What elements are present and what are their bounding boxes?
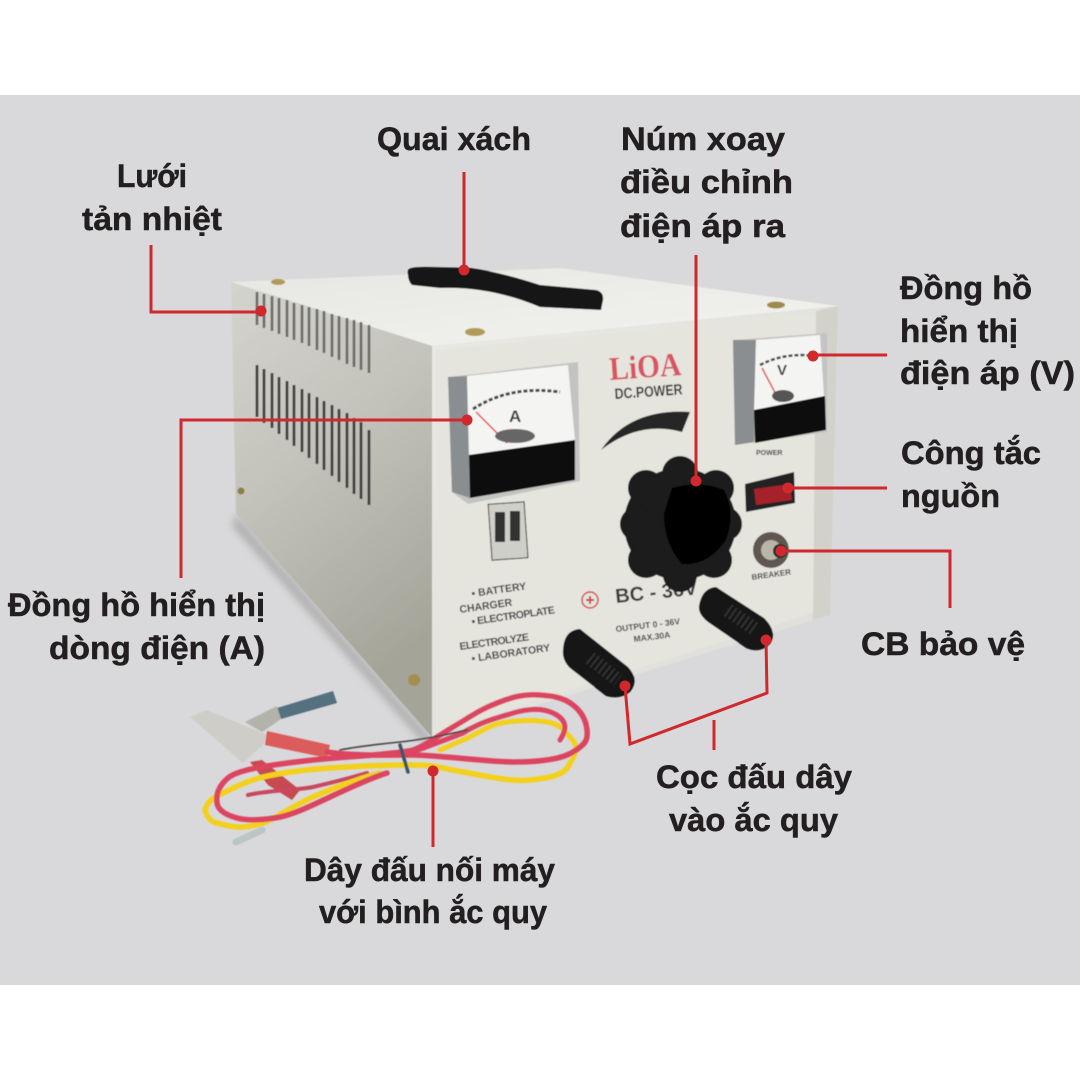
brand logo and panel print: DC.POWER xyxy=(614,381,683,403)
label list on panel: CHARGER xyxy=(459,597,513,616)
callout: ammeter: Đồng hồ hiển thị xyxy=(8,587,265,623)
callout: rotary knob: Núm xoay xyxy=(621,121,785,157)
callout: power switch: Công tắc xyxy=(901,435,1041,471)
side screws xyxy=(238,488,244,494)
callout: terminals xyxy=(620,634,852,838)
wires and clips xyxy=(190,691,587,842)
rotary knob xyxy=(620,456,742,592)
power switch xyxy=(745,472,795,512)
label list on panel: ▪ LABORATORY xyxy=(471,642,551,665)
voltmeter: V xyxy=(777,362,787,379)
model text: MAX.30A xyxy=(633,630,671,644)
callout: voltmeter xyxy=(808,270,1075,391)
brand logo and panel print: POWER xyxy=(756,450,782,457)
handle xyxy=(408,267,603,310)
breaker xyxy=(751,532,792,582)
callout: circuit breaker: CB bảo vệ xyxy=(861,626,1025,662)
callout: cooling vents: tản nhiệt xyxy=(82,201,222,237)
label list on panel: ▪ BATTERY xyxy=(471,580,527,600)
product photo: battery charger xyxy=(190,267,838,842)
top face xyxy=(231,268,838,346)
left terminal xyxy=(563,629,635,697)
brand logo and panel print: LiOA xyxy=(608,347,683,388)
callout: terminals: vào ắc quy xyxy=(669,802,838,838)
callout: power switch: nguồn xyxy=(901,478,1000,514)
model text xyxy=(582,577,699,644)
callout: connecting wires: với bình ắc quy xyxy=(319,894,547,930)
model text: OUTPUT 0 - 36V xyxy=(615,616,681,634)
callout: carrying handle: Quai xách xyxy=(377,121,531,157)
front face xyxy=(432,306,838,737)
right terminal xyxy=(699,587,773,650)
label list on panel: ELECTROLYZE xyxy=(459,631,530,653)
callout: carrying handle xyxy=(377,121,531,276)
callout: voltmeter: Đồng hồ xyxy=(900,270,1032,306)
label list on panel xyxy=(459,580,556,665)
callout: terminals: Cọc đấu dây xyxy=(656,759,852,795)
callout: cooling vents xyxy=(82,158,266,316)
callout: connecting wires xyxy=(304,766,555,930)
callout: power switch xyxy=(782,435,1041,514)
callout: cooling vents: Lưới xyxy=(117,158,187,194)
voltmeter xyxy=(733,333,827,445)
callout: ammeter: dòng điện (A) xyxy=(49,630,265,666)
side face with vents xyxy=(231,282,432,737)
callout: circuit breaker xyxy=(776,546,1025,662)
callout: voltmeter: hiển thị xyxy=(900,313,1018,349)
brand logo and panel print xyxy=(488,347,782,560)
ammeter: A xyxy=(509,407,521,426)
label list on panel: ▪ ELECTROPLATE xyxy=(471,604,556,628)
model text: BC - 36V xyxy=(614,577,699,608)
callout: voltmeter: điện áp (V) xyxy=(900,355,1075,391)
breaker: BREAKER xyxy=(751,568,792,582)
callout: rotary knob xyxy=(620,121,793,486)
roof screws xyxy=(465,328,485,336)
callout: ammeter xyxy=(8,414,472,666)
callout: rotary knob: điều chỉnh xyxy=(620,164,793,200)
ammeter xyxy=(448,362,580,504)
callout: connecting wires: Dây đấu nối máy xyxy=(304,852,555,888)
callout: rotary knob: điện áp ra xyxy=(620,208,785,244)
